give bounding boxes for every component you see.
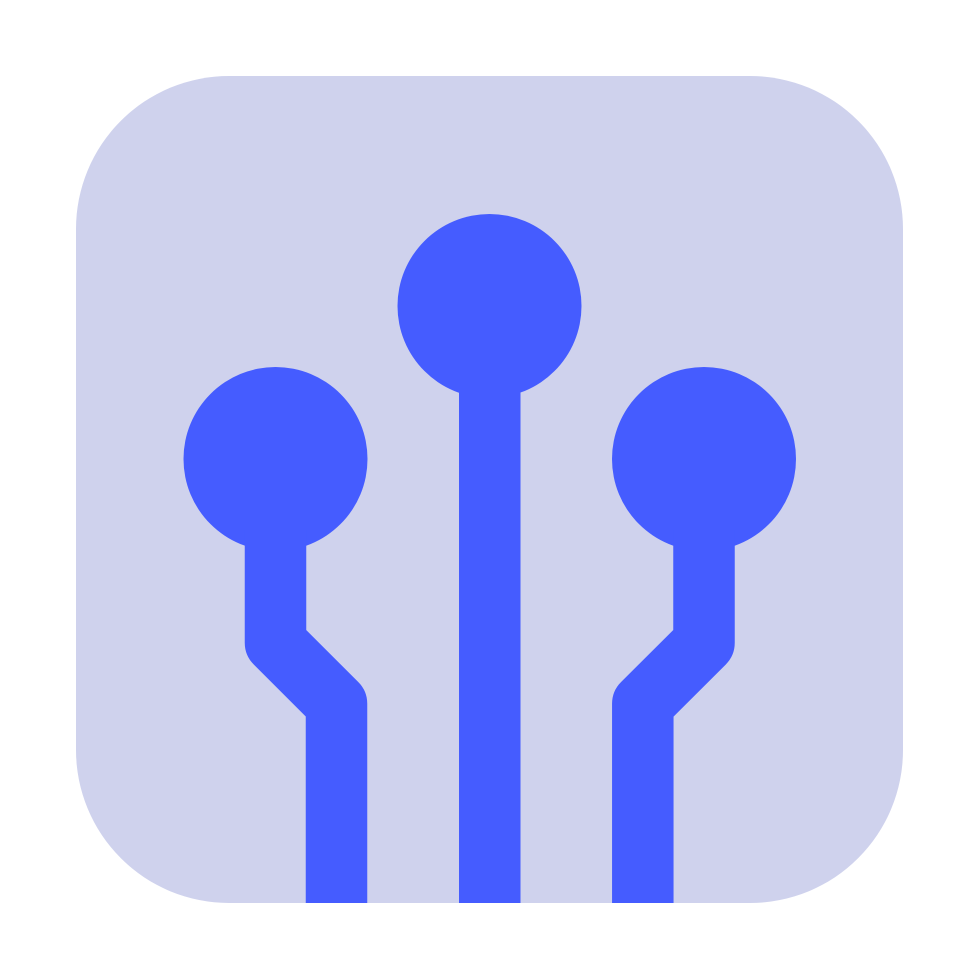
- circuit: left node: [184, 367, 368, 903]
- circuit: right node: [612, 367, 796, 903]
- circuit: center node: [398, 214, 582, 903]
- panel: rounded square background: [76, 76, 903, 903]
